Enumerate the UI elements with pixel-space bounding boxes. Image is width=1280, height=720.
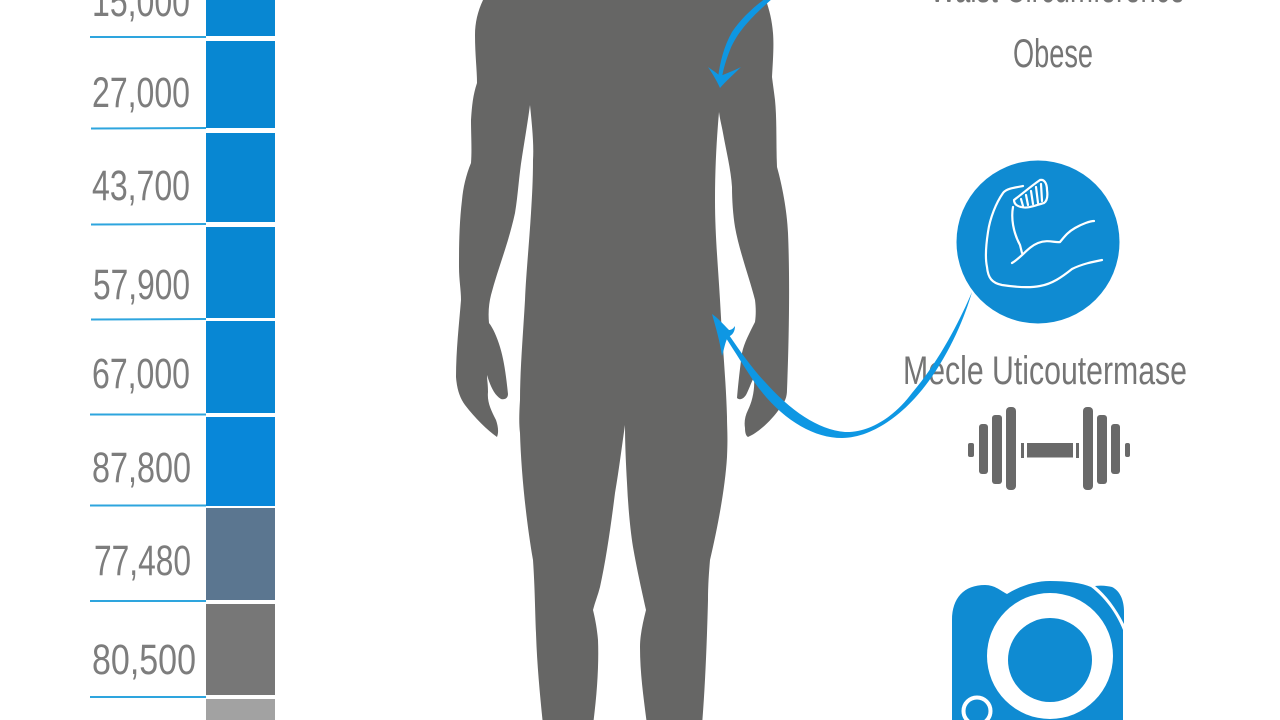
value labels: 77,480 [94,537,191,585]
row divider lines [90,37,206,697]
arrow: upper arrow into shoulder [708,0,773,88]
arrow: lower curved arrow from muscle icon to hip [712,292,972,438]
bar segments [206,0,275,720]
value labels: 27,000 [92,69,190,117]
icon: dumbbell [968,407,1130,490]
label: muscle text: Mecle Uticoutermase [903,349,1187,393]
value labels: 80,500 [92,636,196,684]
icon: flexed muscle in blue circle [956,160,1120,324]
icon: measuring tape [952,581,1124,720]
label: Obese: Obese [1013,32,1093,76]
value labels: 67,000 [92,350,190,398]
value labels: 43,700 [92,162,190,210]
value labels: 87,800 [92,444,191,492]
human body silhouette [456,0,789,720]
value labels: 57,900 [93,261,190,309]
value labels [92,0,196,684]
panel: stacked scale column with values [90,0,275,720]
